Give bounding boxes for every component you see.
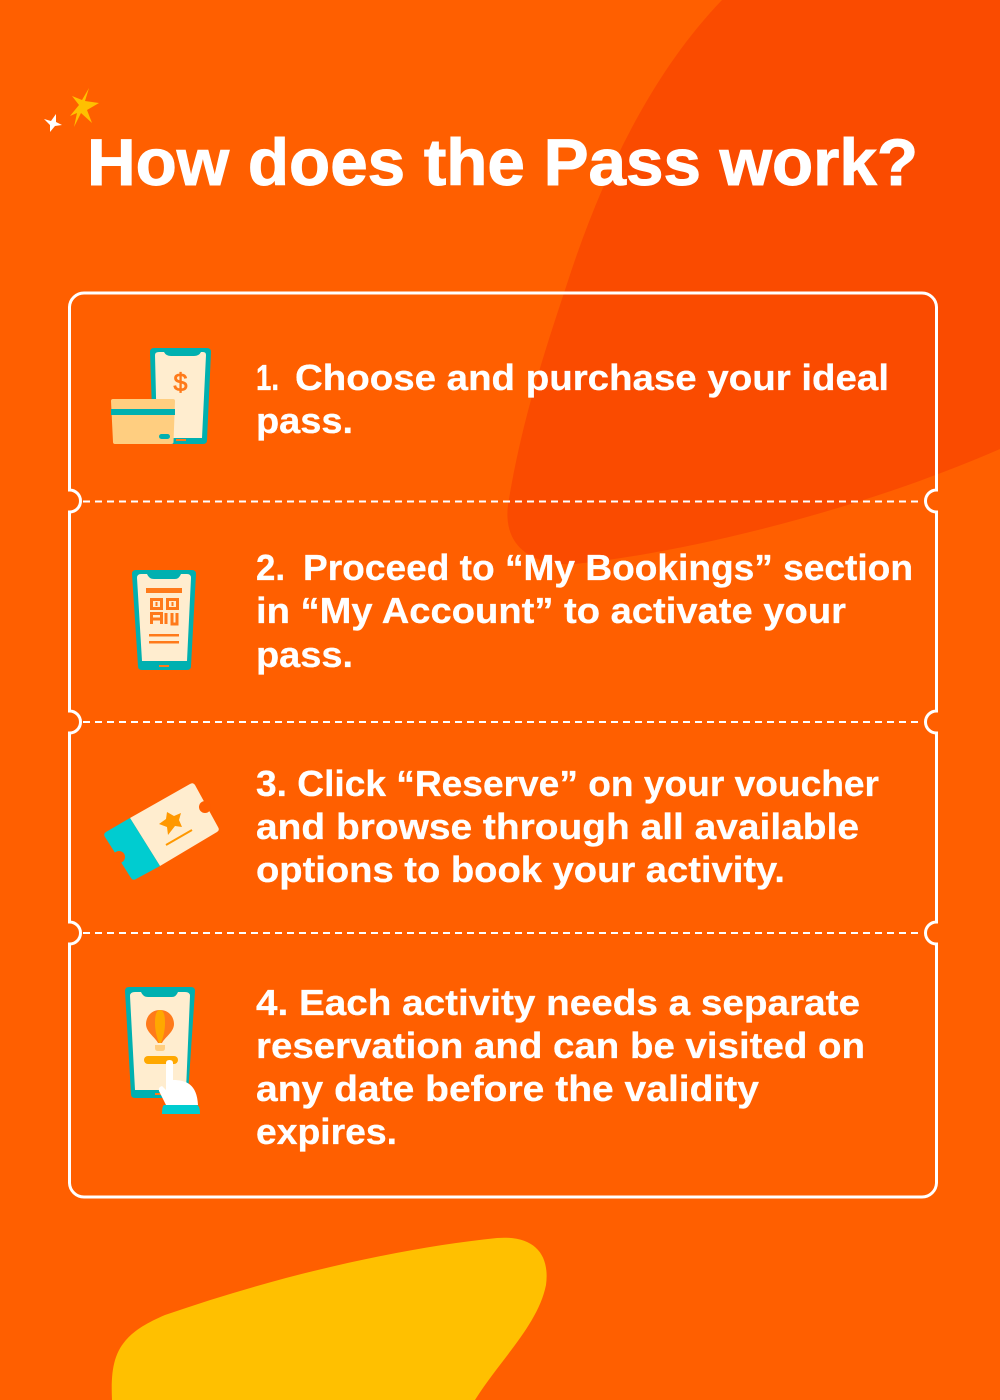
panel: ticket outline (70, 293, 936, 1197)
text: step 4: any date before the validity (256, 1068, 759, 1109)
text: step 4: reservation and can be visited on (256, 1025, 865, 1066)
icon: ticket (104, 783, 219, 880)
step 4 (125, 982, 865, 1152)
text: step 4 (256, 982, 865, 1152)
text: step 2: in “My Account” to activate your (256, 590, 846, 631)
text: step 3: options to book your activity. (256, 849, 785, 890)
text: step 3: and browse through all available (256, 806, 859, 847)
text: step 3: 3. Click “Reserve” on your voucher (256, 763, 879, 804)
icon: phone and credit card (111, 348, 211, 444)
step 1 (111, 348, 889, 444)
step 3 (104, 763, 879, 890)
text: step 4: 4. Each activity needs a separate (256, 982, 860, 1023)
icon: sparkles (44, 88, 99, 132)
background blob: top right (507, 0, 1000, 564)
text: step 1 (256, 357, 889, 441)
text: step 2 (256, 547, 913, 675)
title: How does the Pass work? (87, 125, 918, 199)
icon: phone with balloon and tapping hand (125, 987, 200, 1114)
text: step 1: Choose and purchase your ideal (295, 357, 889, 398)
text: step 2: pass. (256, 634, 353, 675)
text: step 2: 2. (256, 547, 285, 588)
icon: phone and credit card: $ (174, 369, 188, 397)
text: step 1: pass. (256, 400, 353, 441)
text: step 4: expires. (256, 1111, 397, 1152)
text: step 2: Proceed to “My Bookings” section (303, 547, 913, 588)
background blob: bottom yellow (112, 1238, 547, 1400)
step 2 (132, 547, 913, 675)
text: step 3 (256, 763, 879, 890)
icon: phone with QR code (132, 570, 196, 670)
text: step 1: 1. (256, 357, 279, 398)
